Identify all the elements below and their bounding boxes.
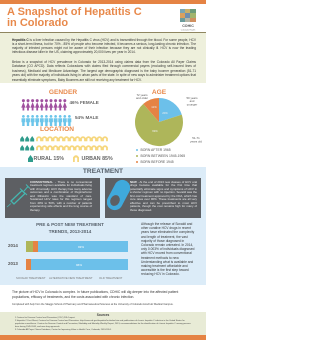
heading: gender: GENDER xyxy=(49,89,77,96)
pie chart: age xyxy=(135,96,202,146)
funding note: Completed with help from the Skaggs School of Pharmacy and Pharmaceutical Sciences at the University of Colorado Anschutz Medical Campus. xyxy=(12,303,173,306)
pie chart: age: 69% xyxy=(152,129,158,133)
label: 72 years and older: 72 years xyxy=(136,93,148,97)
bar: 2014 xyxy=(8,241,128,252)
icon: pill xyxy=(107,180,130,210)
heading: treatment: TREATMENT xyxy=(83,168,123,175)
panel: introduction xyxy=(0,32,206,83)
pie chart: age: years old xyxy=(190,140,202,144)
segments 2014 xyxy=(26,240,128,252)
segments 2013: 96% xyxy=(76,262,82,266)
legend item: born after 1965: BORN AFTER 1965 xyxy=(140,148,171,152)
logo xyxy=(180,9,196,31)
heading: trends: PRE & POST NEW TREATMENT xyxy=(36,222,104,227)
panel: treatment xyxy=(0,167,206,285)
sources list xyxy=(15,316,191,331)
bottom orange bar xyxy=(0,335,206,340)
sources list: 1 Centers for Disease Control and Prevention (CDC) 2014 report. xyxy=(15,317,75,319)
icon: syringe xyxy=(6,184,30,208)
title: A Snapshot of Hepatitis C xyxy=(7,6,142,18)
label: male: 54% MALE xyxy=(75,115,98,120)
pie chart: age: and xyxy=(190,99,195,103)
pie chart: age: 11% xyxy=(151,105,157,109)
label: rural: RURAL 15% xyxy=(34,156,64,162)
legend item: born before: BORN BEFORE 1945 xyxy=(140,160,174,164)
text block: treatment summary: Although the release of Sovaldi and other curative HCV drugs in recent years have eliminated the complexity and length of treatment, the vast majority of those diagnosed in Colorado remain untreated. In 2014, only 0.003% of individuals diagnosed with HCV moved from conventional treatment methods to new. Understanding what is available and making treatment affordable and accessible is the first step toward reducing HCV in Colorado. xyxy=(141,222,194,276)
new treatment text: NEW - At the end of 2013 new classes of HCV oral drugs became available for the first time that potentially eliminate signs and symptoms of HCV in a shorter regimen with no injection. Sovaldi was the first oral treatment approved by the FDA, which has cure rates over 90%. These treatments are all very effective and can be prescribed to most HCV patients, though the cost remains high for many of those diagnosed. xyxy=(130,180,197,212)
sources list: 3 Colorado All Payer Claims Database, Center for Improving Value in Health Care, Colorado, 2013-2014. xyxy=(15,329,111,331)
icons: male row xyxy=(22,115,72,126)
panel: sources xyxy=(0,312,206,335)
pie chart: age: 51-71 xyxy=(192,136,200,140)
label: urban: URBAN 85% xyxy=(82,156,113,162)
pie chart: age: 20% xyxy=(162,111,168,115)
pie chart: age: 50 years xyxy=(186,96,198,100)
bar chart: trends xyxy=(8,241,128,270)
label: female: 46% FEMALE xyxy=(70,100,99,105)
heading: trends xyxy=(36,222,104,234)
card: new treatment xyxy=(105,178,201,218)
label: 72 years and older: and older xyxy=(136,96,148,100)
icons: location rows xyxy=(20,136,108,150)
legend: treatment types xyxy=(16,276,122,280)
legend: birth cohorts xyxy=(136,148,185,164)
intro paragraph 2: Below is a snapshot of HCV prevalence in Colorado for 2013-2014 using claims data from the Colorado All Payer Claims Database (CO APCD). Data reflects Coloradans with claims filed through commercial payers (excluding self-insured lines of business), Medicaid and Medicare Advantage. The largest age demographic diagnosed is the baby boomer generation (51-71 years old) with the majority of individuals living in urban parts of the state. In spite of new ways to administer treatment options that essentially eliminate symptoms, Baby Boomers are still not receiving any treatment for HCV. xyxy=(12,60,196,82)
top orange bar xyxy=(0,0,206,4)
legend item: alternative: ALTERNATIVE NEW TREATMENT xyxy=(49,276,93,280)
segments 2013 xyxy=(26,258,128,270)
closing text: The picture of HCV in Colorado is complex. In future publications, CDHIC will dig deeper into the affected patient populations, efficacy of treatments, and the costs associated with chronic infection. xyxy=(12,290,178,299)
card: conventional treatment xyxy=(5,178,100,218)
intro paragraph 1: Hepatitis C is a liver infection caused by the Hepatitis C virus (HCV) and is transmitted through the blood. For some people, HCV is a short-term illness, but for 70% - 85% of people who become infected, it becomes a serious, long-lasting chronic infection. The majority of infected persons might not be aware of their infection because they are not clinically ill. HCV is now the leading infectious disease killer in the US, claiming approximately 20,000 lives per year in 2014. xyxy=(12,38,196,54)
title xyxy=(7,6,142,29)
label: 72 years and older xyxy=(136,93,148,100)
pie chart: age: younger xyxy=(187,102,197,106)
heading: trends: TRENDS, 2013-2014 xyxy=(49,229,91,234)
sources list: 2 Hepatitis C Fact Sheet, Centers for Disease Control and Prevention. http://www.cdc.gov/hepatitis/hcv/index.htm and publications of chronic hepatitis C infection in the United States for population surveillance. Centers for Disease Control and Prevention, Morbidity and Mortality Weekly Report, 2013; recommendations for the identification of chronic hepatitis C among persons born during 1945-1965, and new drug approvals. xyxy=(15,320,191,328)
icons: female row xyxy=(21,99,67,110)
segments 2014: 93% xyxy=(78,244,84,248)
bar: 2013 xyxy=(8,259,128,270)
legend item: sovaldi: SOVALDI TREATMENT xyxy=(16,276,46,280)
conventional text: CONVENTIONAL - There is no conventional treatment regimen available for individuals living with chronically. HCV therapy has many adverse outcomes and a combination of Peginterferon and Ribavirin was the standard of care. Sustained HCV rates for this regimen ranged from 40% to 50%, with a number of patients experiencing side effects and the long course of therapy. xyxy=(30,180,92,212)
title: in Colorado xyxy=(7,17,68,29)
heading: location: LOCATION xyxy=(40,126,74,132)
logo: COHIC xyxy=(182,24,194,28)
year label 2014: 2014 xyxy=(8,243,18,248)
heading: sources: Sources xyxy=(97,312,109,316)
label: urban xyxy=(73,155,113,162)
heading: age: AGE xyxy=(152,89,166,96)
legend item: born between: BORN BETWEEN 1945-1965 xyxy=(140,154,185,158)
legend item: old: OLD TREATMENT xyxy=(99,276,122,280)
year label 2013: 2013 xyxy=(8,261,18,266)
